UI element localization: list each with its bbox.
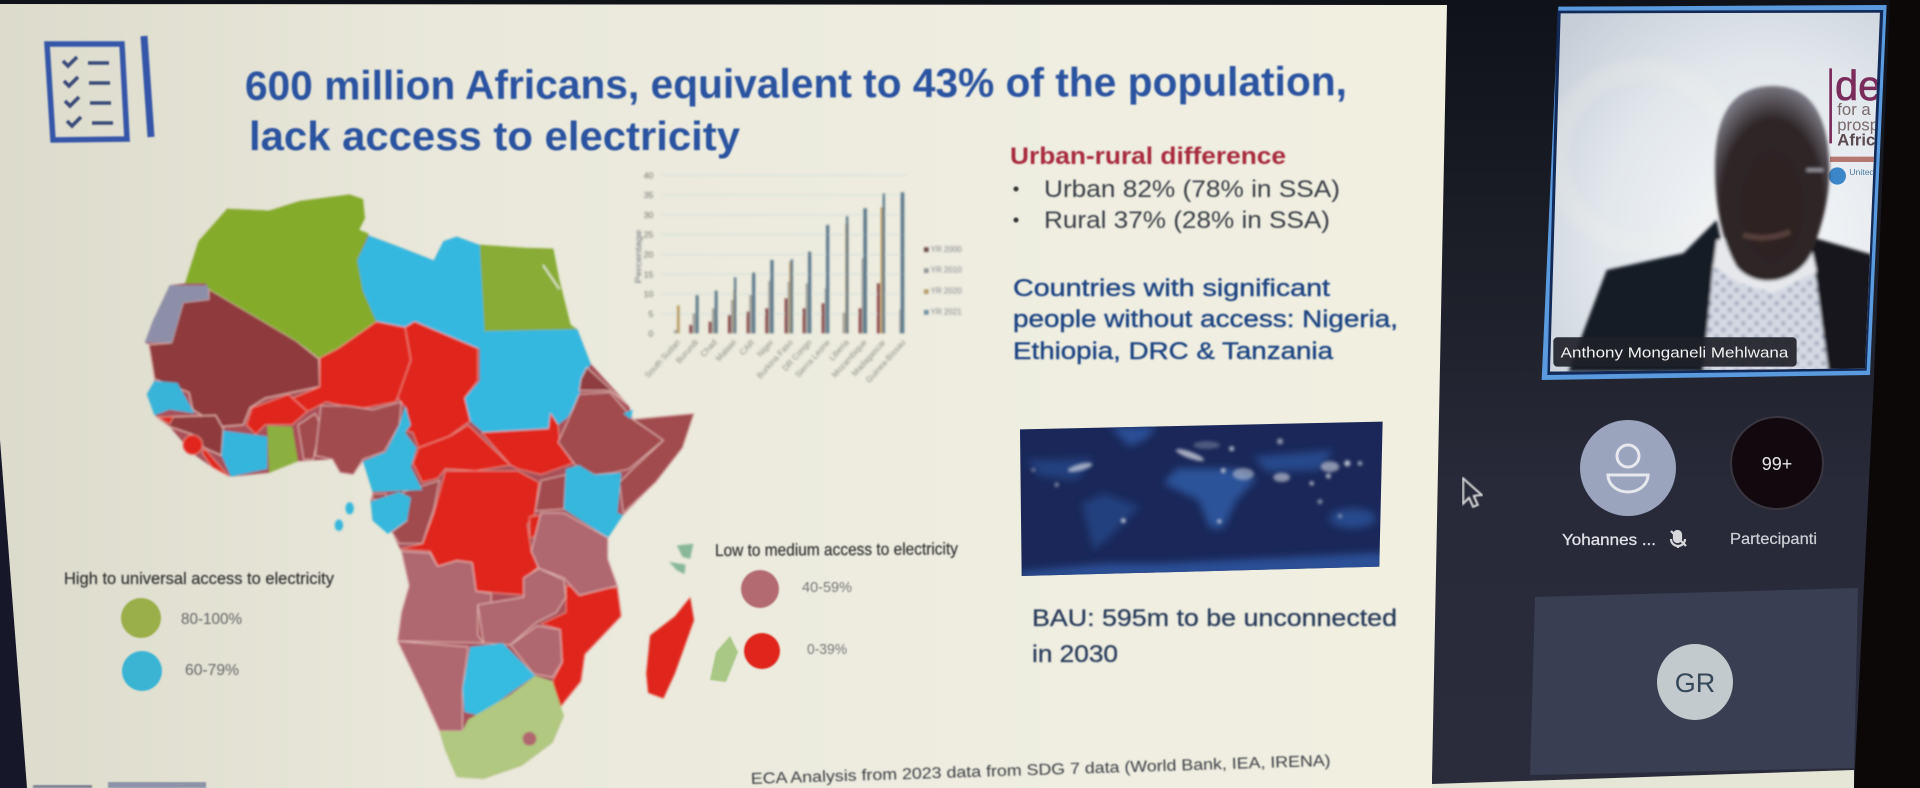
image: world at night — [1020, 422, 1383, 580]
text: urban-rural difference: Urban 82% (78% in SSA) — [1044, 176, 1340, 203]
speaker figure — [1568, 86, 1873, 372]
participants counter: 99+ — [1762, 454, 1792, 474]
text: BAU projection: BAU: 595m to be unconnected — [1032, 605, 1397, 632]
bar chart: access by country: Percentage — [634, 229, 643, 283]
text: BAU projection — [1032, 605, 1397, 668]
chart legend: YR 2000 — [931, 245, 962, 254]
icon: mouse cursor — [1463, 478, 1482, 507]
logo: ideas for a prosperous Africa: prosp — [1837, 116, 1879, 135]
legend: high to universal access: High to universal access to electricity — [64, 569, 334, 588]
participants counter: Partecipanti — [1730, 531, 1817, 548]
participant tile: GR — [1530, 588, 1858, 775]
legend: high to universal access — [64, 569, 334, 691]
chart country labels: Burundi — [673, 337, 700, 365]
map of Africa by electricity access — [145, 195, 694, 779]
legend: low to medium access — [715, 539, 958, 669]
Western Sahara — [145, 285, 209, 343]
text: countries without access — [1013, 275, 1398, 365]
text: countries without access: Ethiopia, DRC & Tanzania — [1013, 338, 1334, 365]
icon: checklist — [47, 36, 151, 140]
Ivory Coast — [221, 431, 267, 477]
left bezel — [0, 440, 27, 788]
icon: muted microphone — [1671, 531, 1686, 548]
chart legend — [924, 245, 962, 316]
chart country labels: Sierra Leone — [793, 337, 832, 379]
participant: Yohannes — [1562, 420, 1686, 549]
bar chart: access by country — [634, 170, 962, 385]
Nigeria, Benin, Ethiopia, Horn — [298, 368, 694, 544]
source note: ECA Analysis from 2023 data from SDG 7 data (World Bank, IEA, IRENA) — [751, 753, 1331, 788]
chart legend: YR 2010 — [931, 265, 962, 274]
chart country labels — [642, 337, 908, 385]
logo: ideas for a prosperous Africa: de — [1835, 62, 1881, 109]
continent silhouette — [145, 195, 694, 779]
bar chart: access by country: 0 — [649, 329, 654, 339]
participants counter — [1730, 417, 1823, 548]
right black screen bezel — [1854, 0, 1920, 788]
title — [245, 58, 1347, 159]
bar chart: access by country: 25 — [644, 230, 654, 240]
bar chart: access by country: 20 — [644, 250, 654, 260]
text: urban-rural difference — [1010, 143, 1340, 234]
Algeria — [185, 195, 376, 358]
chart country labels: South Sudan — [642, 337, 682, 380]
text: urban-rural difference: Urban-rural difference — [1010, 143, 1286, 170]
legend: low to medium access: 40-59% — [802, 579, 852, 596]
text: BAU projection: in 2030 — [1032, 641, 1118, 668]
chart legend: YR 2020 — [931, 286, 962, 295]
chart country labels: Chad — [698, 337, 719, 359]
text: urban-rural difference: Rural 37% (28% in SSA) — [1044, 207, 1330, 234]
chart bars — [674, 192, 904, 333]
video tile: speaker — [1542, 5, 1887, 380]
Botswana — [463, 643, 535, 716]
bar chart: access by country: 40 — [644, 170, 654, 180]
title: lack access to electricity — [249, 113, 740, 159]
chart country labels: Madagascar — [849, 337, 888, 378]
participant tile: GR: GR — [1675, 668, 1715, 698]
slide panel — [0, 4, 1447, 788]
logo: ideas for a prosperous Africa: for a — [1837, 100, 1871, 119]
Comoros and small islands — [677, 544, 693, 559]
bar chart: access by country: 30 — [644, 210, 654, 220]
title: 600 million Africans, equivalent to 43% of the population, — [245, 58, 1347, 109]
logo: ideas for a prosperous Africa: United — [1849, 167, 1875, 177]
bar chart: access by country: 35 — [644, 190, 654, 200]
Ghana — [267, 426, 298, 473]
chart country labels: Malawi — [713, 337, 738, 363]
chart country labels: Mozambique — [829, 337, 869, 379]
UN emblem watermark — [1555, 112, 1558, 197]
island: Mauritius — [710, 636, 738, 682]
Sahel west dark group — [149, 289, 320, 456]
participant: Yohannes: Yohannes ... — [1562, 532, 1656, 549]
Egypt — [480, 246, 576, 332]
South Africa — [440, 676, 564, 779]
text: countries without access: Countries with significant — [1013, 275, 1330, 302]
chart country labels: Guinea-Bissau — [863, 337, 908, 385]
legend: low to medium access: Low to medium access to electricity — [715, 539, 958, 560]
name tag — [1553, 337, 1797, 367]
bar chart: access by country: 15 — [644, 269, 654, 279]
legend: low to medium access: 0-39% — [807, 641, 847, 658]
legend: high to universal access: 80-100% — [181, 611, 242, 628]
bottom slide strip — [1432, 770, 1854, 788]
logo: ideas for a prosperous Africa: Africa — [1837, 130, 1885, 149]
bar chart: access by country: 5 — [649, 309, 654, 319]
chart country labels: Burkina Faso — [755, 337, 795, 380]
logo: ideas for a prosperous Africa — [1828, 68, 1878, 185]
chart country labels: Liberia — [827, 337, 851, 363]
Niger, Chad and central red group — [158, 322, 694, 710]
chart country labels: Niger — [755, 337, 776, 359]
chart country labels: CAR — [737, 337, 756, 357]
Southern medium group — [397, 513, 618, 731]
chart legend: YR 2021 — [931, 307, 962, 316]
Libya — [357, 235, 485, 348]
Senegal — [147, 381, 195, 415]
text: countries without access: people without access: Nigeria, — [1013, 306, 1398, 333]
Cameroon, Gabon, Kenya, Djibouti — [335, 406, 633, 538]
legend: high to universal access: 60-79% — [185, 662, 239, 679]
bar chart: access by country: 10 — [644, 289, 654, 299]
name tag: Anthony Monganeli Mehlwana — [1561, 345, 1789, 361]
chart country labels: DR Congo — [780, 337, 814, 373]
Sudan — [464, 329, 591, 433]
